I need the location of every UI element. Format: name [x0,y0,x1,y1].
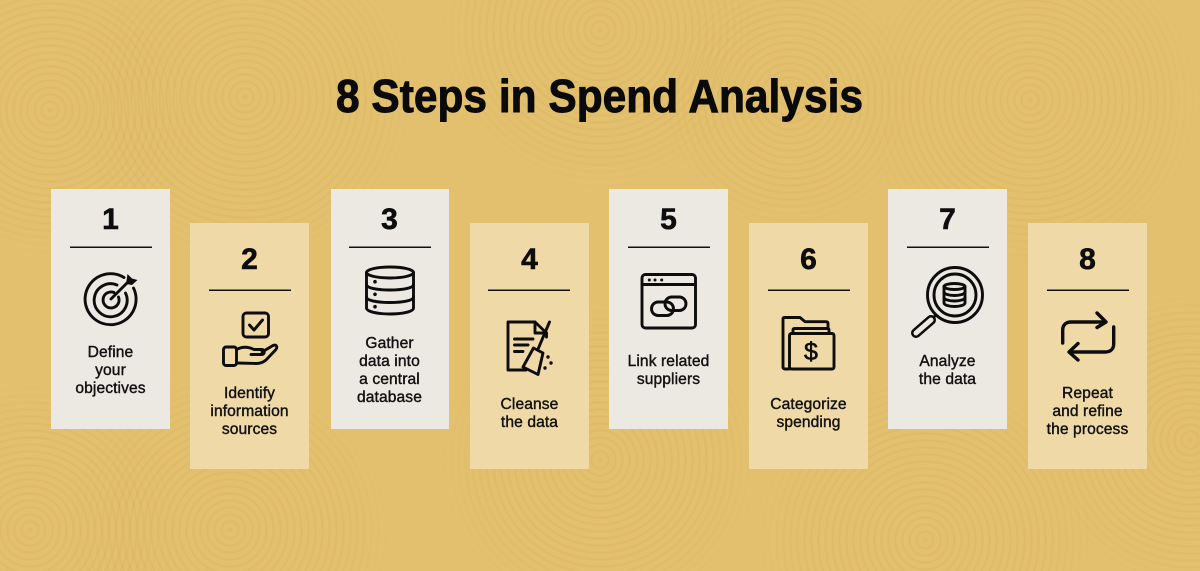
step 3 label: a central [359,371,420,388]
step 8 number: 8 [1079,243,1096,276]
icon: hand holding checkbox [224,313,277,366]
step 1 label: Define [88,344,133,361]
step 5 label: Link related [628,353,709,370]
step 7 label: Analyze [919,353,976,370]
step 2 label: Identify [224,385,275,402]
panel: step 3 [331,189,449,429]
step 6 number: 6 [800,243,817,276]
step 8 label: the process [1047,421,1128,438]
background whorl pattern [88,21,889,568]
title: 8 Steps in Spend Analysis [336,70,863,122]
step 8 label: Repeat [1062,385,1114,402]
icon: folders with dollar sign [783,318,834,369]
step 7 number: 7 [939,203,956,236]
step 8 label: and refine [1052,403,1123,420]
step 3 label: database [357,389,422,406]
step 3 label: data into [359,353,420,370]
step 3 label: Gather [365,335,414,352]
step 2 label: sources [222,421,277,438]
panel: step 7 [888,189,1007,429]
panel: step 2 [190,223,309,469]
dollar sign: $ [804,338,818,366]
step 4 number: 4 [521,243,538,276]
panel: step 4 [470,223,589,469]
panel: step 8 [1028,223,1147,469]
step 2 number: 2 [241,243,258,276]
step 4 label: Cleanse [501,396,558,413]
step 5 number: 5 [660,203,677,236]
icon: document and broom [508,322,553,374]
step 3 number: 3 [381,203,398,236]
icon: repeat arrows [1063,313,1114,360]
step 7 label: the data [919,371,976,388]
icon: database [366,267,414,314]
panel: step 1 [51,189,170,429]
step 2 label: information [210,403,289,420]
step 4 label: the data [501,414,558,431]
icon: browser window with chain link [642,274,696,328]
step 1 label: your [95,362,126,379]
step 6 label: spending [776,414,841,431]
icon: magnifier over database [916,268,982,333]
panel: step 6 [749,223,868,469]
step 6 label: Categorize [770,396,847,413]
step 1 label: objectives [75,380,146,397]
panel: step 5 [609,189,728,429]
step 5 label: suppliers [637,371,700,388]
step 1 number: 1 [102,203,119,236]
icon: target with arrow [85,274,138,325]
